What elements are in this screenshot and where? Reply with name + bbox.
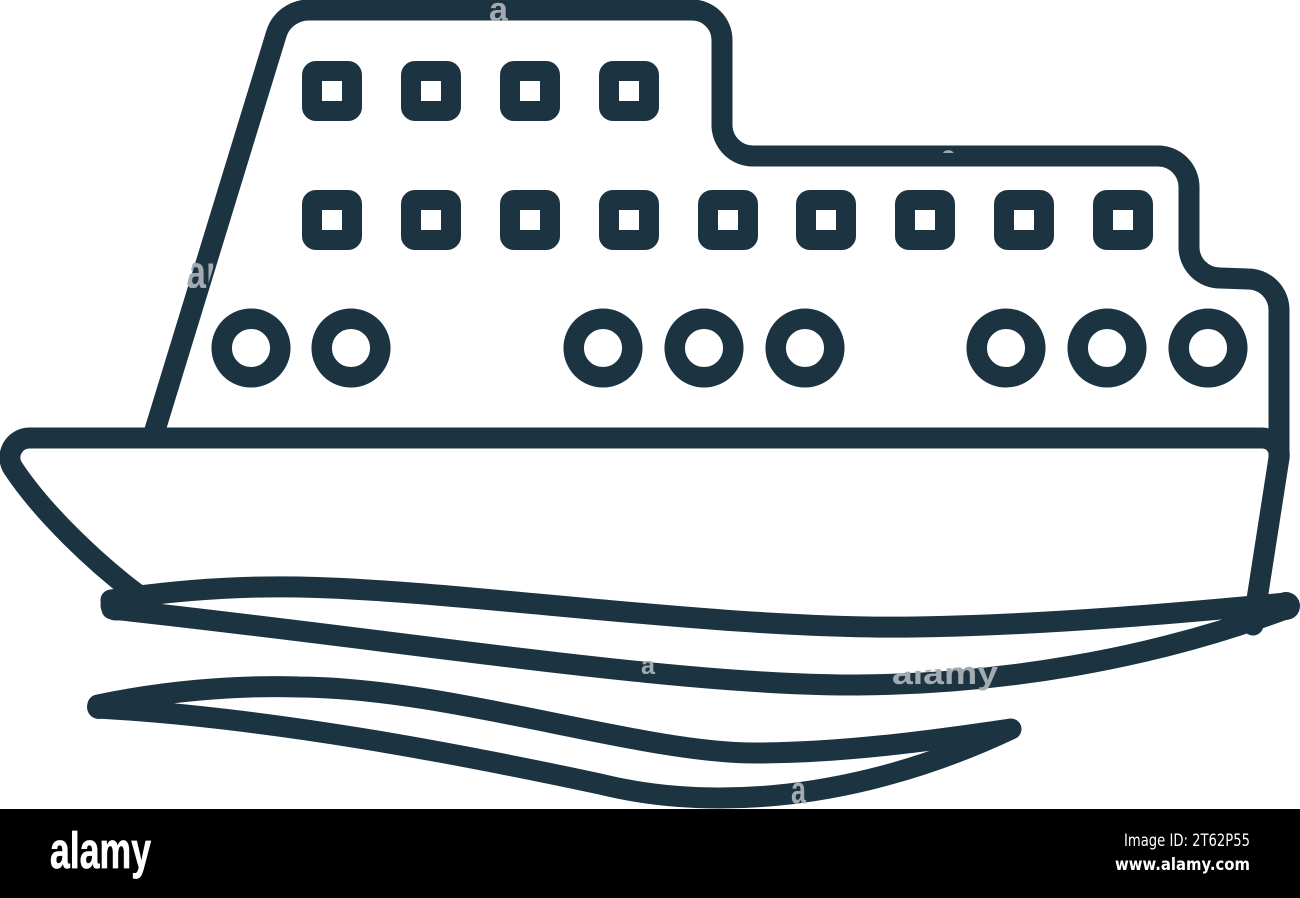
watermark fragments: alamy [892,655,998,691]
watermark fragments: a [791,770,807,812]
watermark fragments: ar [186,246,220,298]
watermark fragments [186,0,998,812]
lower wave [87,687,1011,798]
watermark fragments: a [941,140,956,173]
upper wave [100,587,1300,685]
image id: Image ID: 2T62P55 [1124,831,1250,851]
upper window row [312,71,649,111]
website: www.alamy.com [1115,855,1250,875]
footer bar [0,809,1300,898]
alamy logo: alamy [50,822,151,879]
hull [10,438,1279,625]
watermark fragments: a [641,650,656,680]
middle window row [312,200,1143,240]
ship superstructure outline [155,10,1279,455]
porthole row [222,319,1237,377]
